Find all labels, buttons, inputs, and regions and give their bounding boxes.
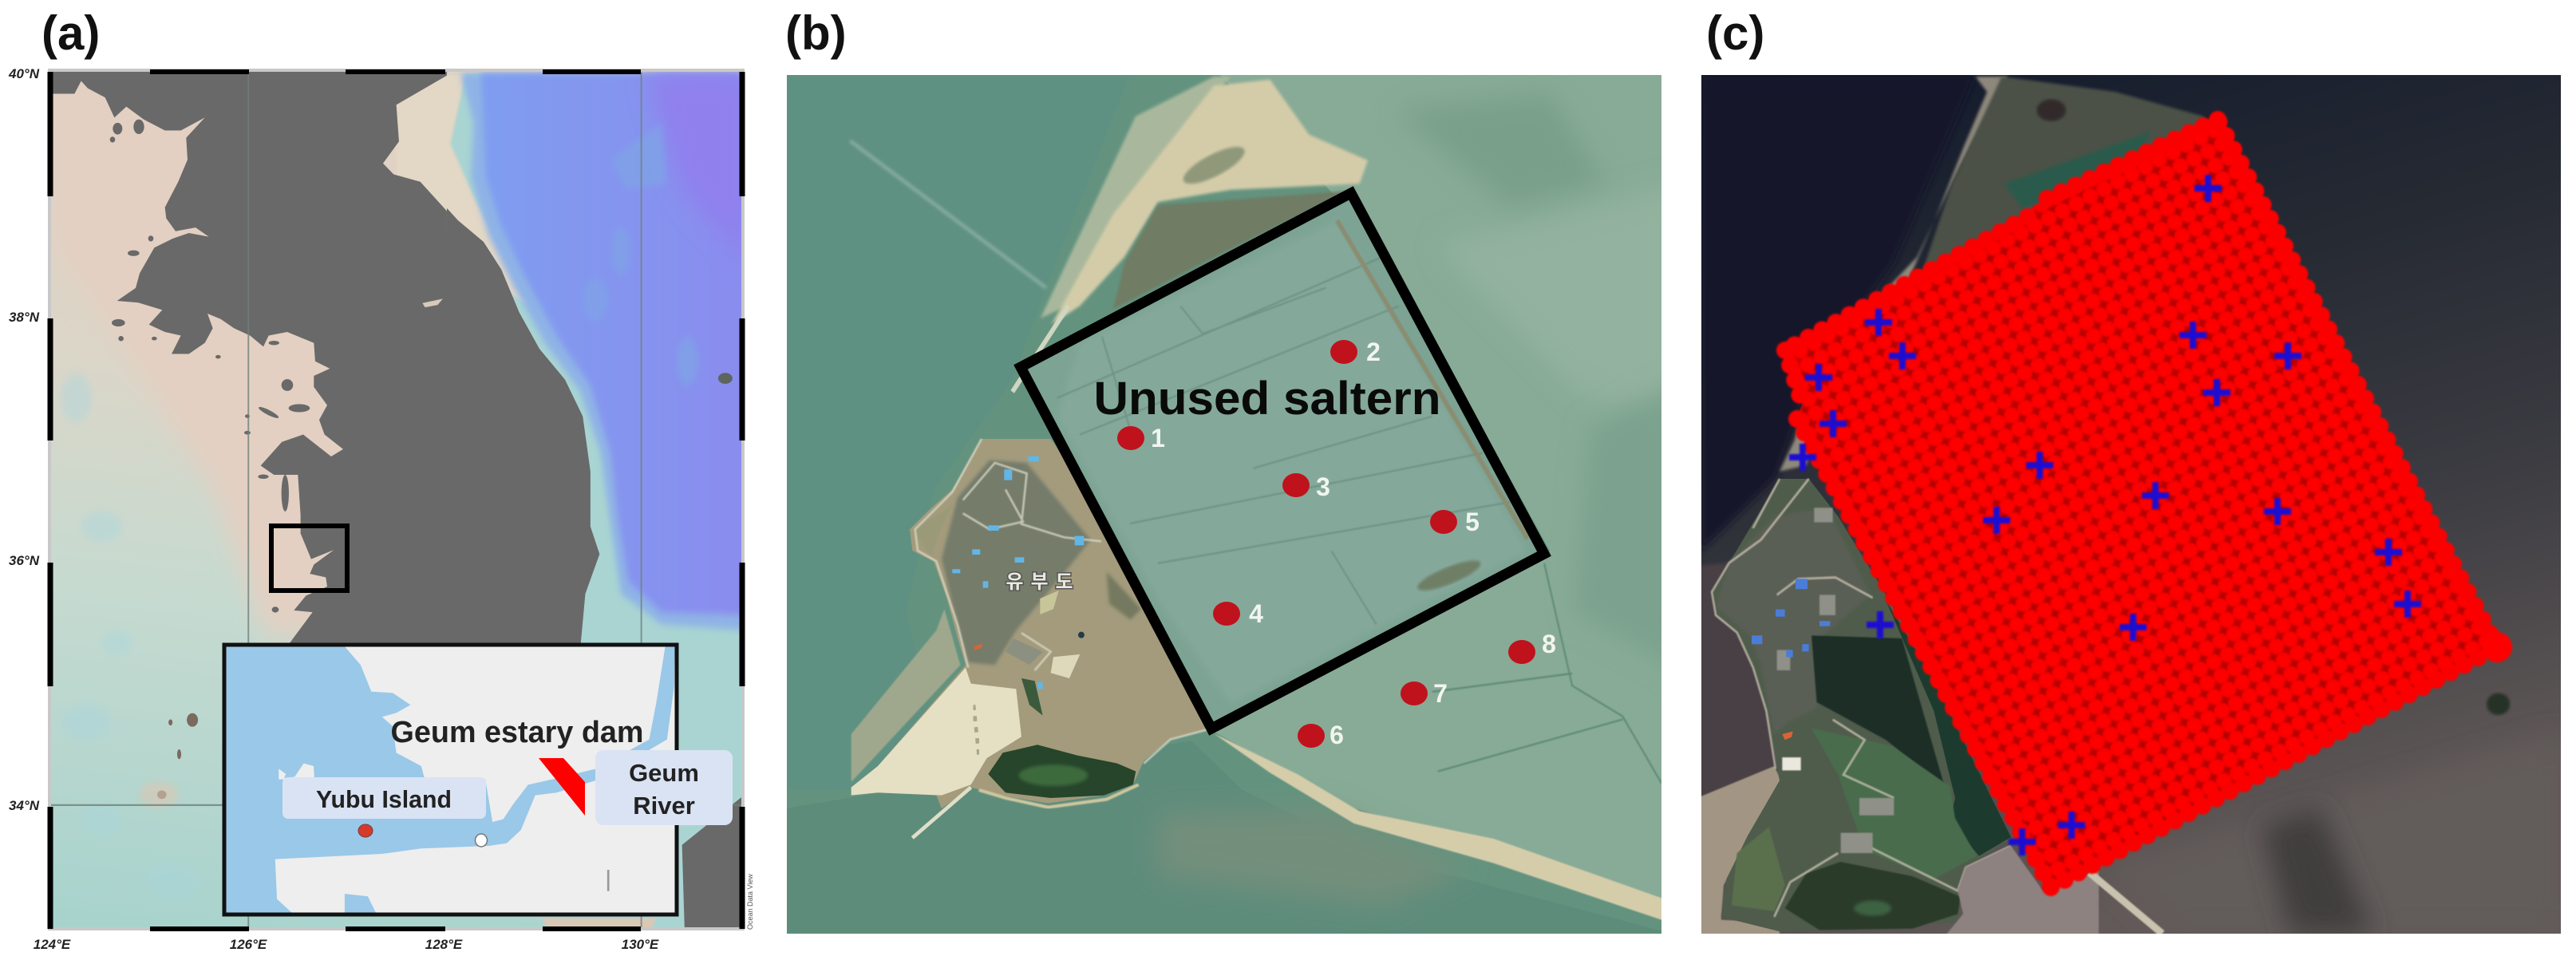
spit <box>1780 77 2008 472</box>
sampling sites 1-8: 7 <box>1433 679 1448 708</box>
label box: Yubu Island <box>282 777 486 819</box>
red model grid <box>1785 120 2512 887</box>
sampling sites 1-8 <box>1117 338 1556 749</box>
label box: Yubu Island: Yubu Island <box>316 785 452 813</box>
sampling sites 1-8: 4 <box>1249 599 1263 628</box>
south spit <box>1214 733 1684 927</box>
forest patch <box>988 745 1136 798</box>
unused saltern outline <box>1021 193 1544 729</box>
sampling sites 1-8: 8 <box>1542 630 1556 658</box>
latitude and longitude labels: 38°N <box>9 310 40 325</box>
label box: Geum River: Geum <box>629 759 699 787</box>
latitude and longitude labels: 36°N <box>9 553 40 568</box>
sampling sites 1-8: 6 <box>1329 721 1344 749</box>
bathymetric map of Korean peninsula <box>48 70 749 930</box>
latitude and longitude labels: 128°E <box>425 937 463 952</box>
sampling sites 1-8: 3 <box>1316 472 1330 501</box>
marker: river mouth <box>476 834 487 847</box>
latitude and longitude labels: 34°N <box>9 798 40 813</box>
panel: (a) regional map <box>8 6 754 952</box>
place name on island: 유부도 <box>1006 571 1081 593</box>
latitude and longitude labels: 130°E <box>622 937 659 952</box>
land mass: east coast <box>443 208 599 649</box>
sand spit <box>1041 77 1231 318</box>
blue observation crosses <box>1789 175 2421 855</box>
marker: Geum estuary dam <box>539 758 585 816</box>
latitude and longitude labels: 124°E <box>34 937 71 952</box>
label: Unused saltern: Unused saltern <box>1093 373 1441 425</box>
aerial image of Yubu Island <box>787 75 1684 937</box>
heading: (a): (a) <box>41 6 100 60</box>
tidal creek <box>1432 563 1661 784</box>
sampling sites 1-8: 2 <box>1366 338 1381 366</box>
land mass: west coast <box>48 72 447 677</box>
island and village <box>851 439 1211 838</box>
sampling sites 1-8: 1 <box>1151 424 1165 452</box>
sand flat <box>851 668 1021 796</box>
sampling sites 1-8: 5 <box>1465 508 1480 536</box>
map frame with tick bars <box>49 70 743 929</box>
latitude and longitude labels <box>8 66 659 952</box>
south road <box>2089 872 2163 934</box>
study-site locator box <box>271 526 347 591</box>
saltern field <box>1021 193 1544 729</box>
satellite image <box>1697 75 2562 943</box>
marker: Yubu Island <box>358 824 373 837</box>
panel: (b) satellite view with sampling sites <box>785 6 1684 937</box>
water <box>225 646 675 915</box>
heading: (b): (b) <box>785 6 847 60</box>
inset map: Geum estuary <box>224 645 733 915</box>
latitude and longitude labels: 40°N <box>8 66 40 81</box>
label box: Geum River <box>595 750 733 825</box>
latitude and longitude labels: 126°E <box>230 937 267 952</box>
label: Geum estary dam: Geum estary dam <box>391 716 643 749</box>
panel: (c) model grid and observation points <box>1697 6 2562 943</box>
heading: (c): (c) <box>1706 6 1764 60</box>
lower island <box>1697 479 2099 943</box>
label box: Geum River: River <box>633 792 695 820</box>
credit: Ocean Data View: Ocean Data View <box>746 874 754 930</box>
